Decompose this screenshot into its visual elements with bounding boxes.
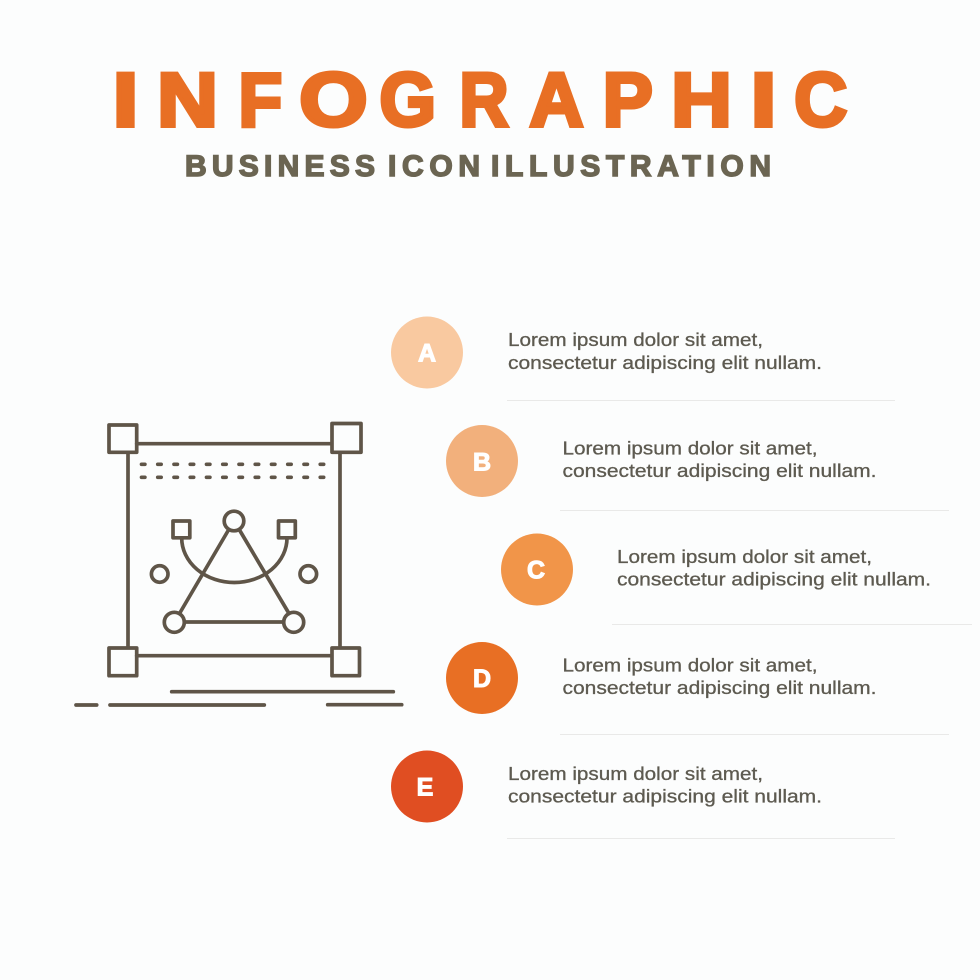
subtitle: ILLUSTRATION xyxy=(491,150,771,183)
title: I xyxy=(113,58,138,143)
subtitle: BUSINESS xyxy=(185,150,375,183)
title: N xyxy=(157,58,218,143)
item C: Lorem ipsum dolor sit amet, xyxy=(617,547,872,567)
title xyxy=(113,58,847,143)
item A: consectetur adipiscing elit nullam. xyxy=(508,353,822,373)
item E: consectetur adipiscing elit nullam. xyxy=(508,786,822,806)
title: H xyxy=(671,58,732,143)
title: G xyxy=(380,58,436,143)
item B: Lorem ipsum dolor sit amet, xyxy=(562,438,818,458)
item D: consectetur adipiscing elit nullam. xyxy=(562,678,876,698)
item C xyxy=(501,534,972,624)
title: F xyxy=(238,58,282,143)
title: C xyxy=(794,58,847,143)
title: P xyxy=(603,58,653,143)
item B: B xyxy=(473,448,491,476)
item D: Lorem ipsum dolor sit amet, xyxy=(562,655,818,675)
item D: D xyxy=(473,665,491,693)
item E: Lorem ipsum dolor sit amet, xyxy=(508,764,763,784)
item A: Lorem ipsum dolor sit amet, xyxy=(508,330,763,350)
title: O xyxy=(299,58,368,143)
item C: consectetur adipiscing elit nullam. xyxy=(617,570,931,590)
title: I xyxy=(751,58,776,143)
title: R xyxy=(460,58,508,143)
item B xyxy=(446,425,949,510)
title: A xyxy=(530,58,584,143)
item D xyxy=(446,642,949,734)
subtitle xyxy=(185,150,771,183)
subtitle: ICON xyxy=(388,150,480,183)
item A xyxy=(391,316,895,400)
item C: C xyxy=(527,556,545,584)
icon: vector design frame xyxy=(76,424,402,705)
item B: consectetur adipiscing elit nullam. xyxy=(562,461,876,481)
item E xyxy=(391,750,895,838)
item E: E xyxy=(417,774,433,802)
item A: A xyxy=(418,340,436,368)
